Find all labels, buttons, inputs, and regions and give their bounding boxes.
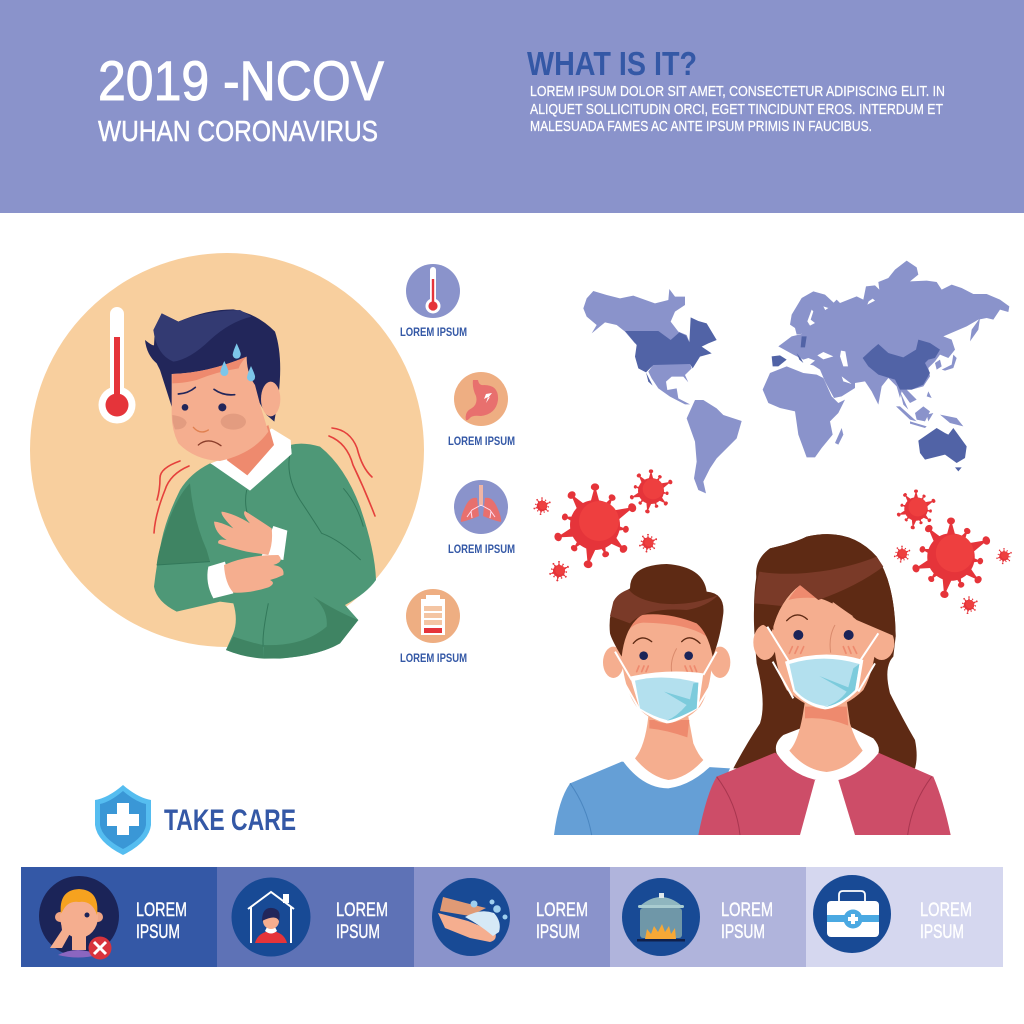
world map — [583, 261, 1009, 493]
woman in red jacket — [698, 534, 951, 835]
icon: battery — [406, 589, 460, 643]
step 1: don't touch face — [21, 867, 218, 967]
subtitle: Wuhan Coronavirus: WUHAN CORONAVIRUS — [98, 116, 378, 148]
step 4: cook food — [610, 867, 807, 967]
text — [920, 900, 972, 943]
description text: LOREM IPSUM DOLOR SIT AMET, CONSECTETUR ADIPISCING ELIT. IN — [530, 83, 945, 100]
man figure — [145, 309, 376, 659]
virus particles: left cluster — [533, 469, 673, 582]
text — [536, 900, 588, 943]
sweat drops — [220, 343, 255, 381]
panel: sick man illustration — [30, 253, 424, 659]
icon: stomach — [454, 372, 508, 426]
text: IPSUM — [336, 922, 380, 943]
icon: thermometer — [406, 264, 460, 318]
text — [136, 900, 187, 943]
text: IPSUM — [136, 922, 180, 943]
text: LOREM — [920, 900, 972, 921]
step 5: first aid — [806, 867, 1003, 967]
hands and cuffs — [262, 526, 287, 560]
description text: ALIQUET SOLLICITUDIN ORCI, EGET TINCIDUNT EROS. INTERDUM ET — [530, 101, 943, 118]
sweater — [154, 444, 376, 659]
icon: washing hands — [432, 878, 510, 956]
text — [336, 900, 388, 943]
text: LOREM — [136, 900, 187, 921]
symptom: low battery — [400, 589, 467, 665]
symptom: stomach — [448, 372, 515, 448]
description text: MALESUADA FAMES AC ANTE IPSUM PRIMIS IN FAUCIBUS. — [530, 118, 872, 135]
peach background circle — [30, 253, 424, 647]
shiver lines — [154, 428, 375, 533]
text: LOREM — [336, 900, 388, 921]
step 2: stay home — [217, 867, 414, 967]
virus particles: right cluster — [894, 489, 1012, 614]
icon: large thermometer — [98, 307, 136, 424]
step 3: wash hands — [414, 867, 611, 967]
text: IPSUM — [920, 922, 964, 943]
heading: what is it: WHAT IS IT? — [527, 45, 697, 82]
text: IPSUM — [721, 922, 765, 943]
symptom: lungs — [448, 480, 515, 556]
man in blue shirt — [554, 564, 730, 835]
icon: pot on flame — [622, 878, 700, 956]
icon: touching face — [39, 876, 119, 960]
take care heading — [95, 785, 296, 855]
label: LOREM IPSUM — [448, 542, 515, 556]
symptom: thermometer — [400, 264, 467, 339]
map: Eurasia, Africa, Oceania — [763, 261, 1009, 471]
map: Americas — [583, 289, 742, 493]
icon: first aid kit — [813, 875, 891, 953]
text: LOREM — [536, 900, 588, 921]
icon: shield — [95, 785, 151, 855]
collar and neck — [211, 428, 292, 491]
text: LOREM — [721, 900, 773, 921]
title: 2019 -NCOV: 2019 -NCOV — [98, 49, 385, 112]
icon: lungs — [454, 480, 508, 534]
head and hair — [145, 309, 280, 461]
label: LOREM IPSUM — [400, 651, 467, 665]
people wearing masks — [554, 534, 951, 835]
icon: person in house — [232, 878, 310, 956]
header banner — [0, 0, 1024, 213]
prevention strip — [21, 867, 1003, 967]
heading text: TAKE CARE — [164, 804, 296, 837]
description text — [530, 83, 945, 135]
label: LOREM IPSUM — [400, 325, 467, 339]
text — [721, 900, 773, 943]
text: IPSUM — [536, 922, 580, 943]
label: LOREM IPSUM — [448, 434, 515, 448]
